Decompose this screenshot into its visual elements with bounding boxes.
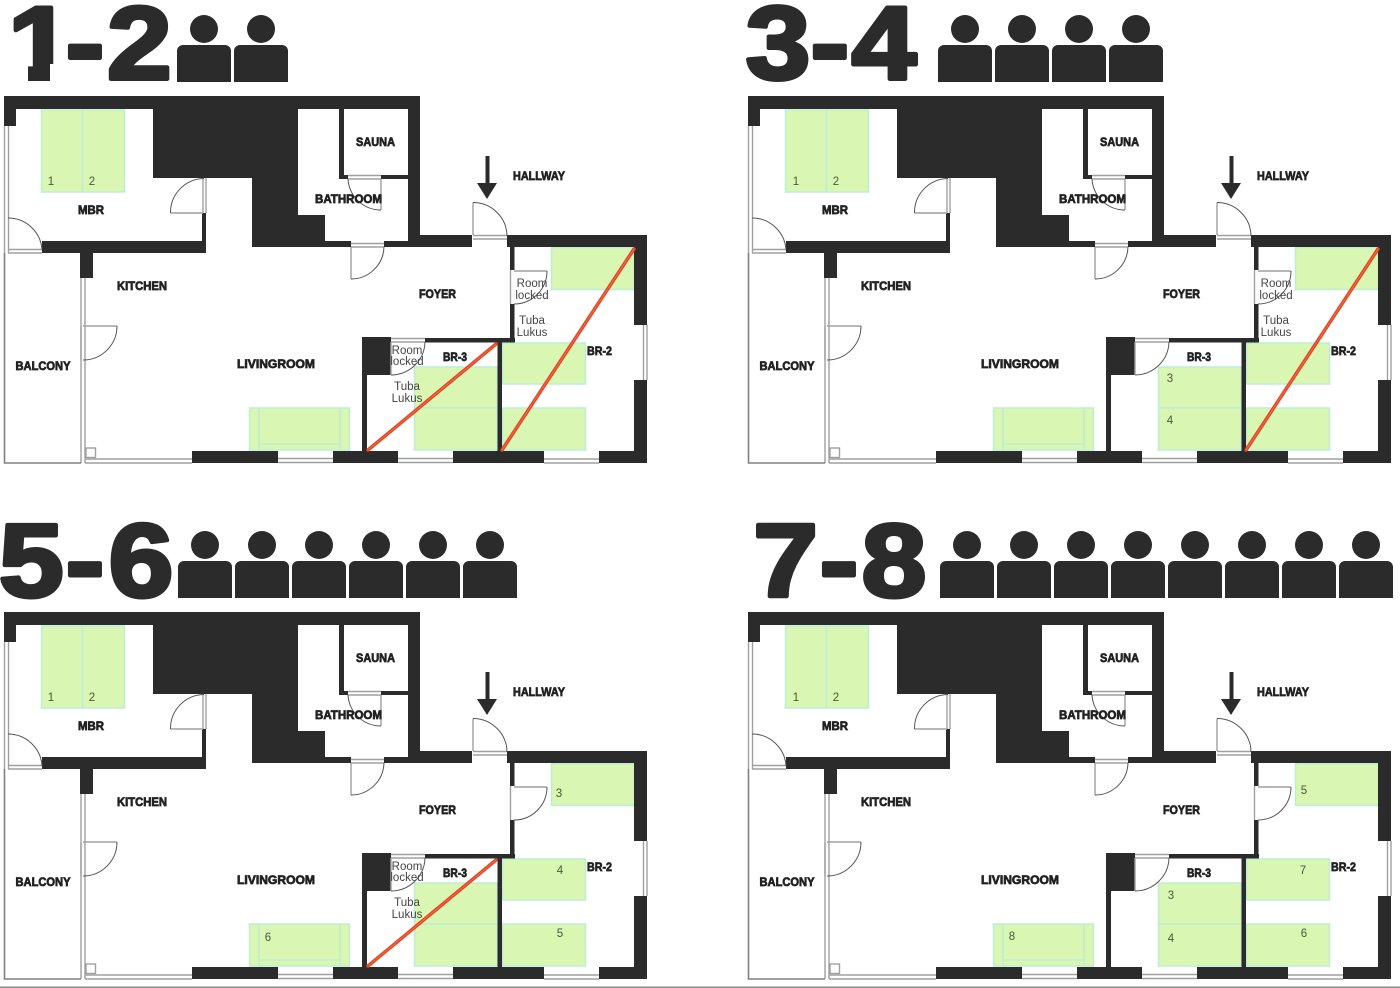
bed numbers: 2 (833, 692, 839, 704)
bed numbers (793, 692, 1307, 945)
room labels: KITCHEN (861, 795, 911, 809)
room labels (16, 651, 612, 889)
room labels: MBR (78, 203, 104, 217)
panel: 3-4 guests (746, 0, 1391, 463)
beds and sofa (786, 626, 1378, 966)
bed numbers: 2 (89, 692, 95, 704)
bed numbers: 3 (1168, 890, 1174, 902)
bed numbers: 2 (833, 176, 839, 188)
walls and doors (748, 612, 1391, 979)
closed room notes: Lukus (392, 393, 423, 405)
panel: 7-8 guests (748, 503, 1393, 979)
room labels: KITCHEN (117, 795, 167, 809)
closed room notes: Lukus (1261, 327, 1292, 339)
closed room notes: Tuba (519, 315, 545, 327)
walls and doors (4, 612, 647, 979)
beds and sofa (786, 110, 1378, 450)
room labels: BATHROOM (1059, 192, 1126, 206)
walls and doors (748, 96, 1391, 463)
closed room notes: Room (517, 278, 547, 290)
room labels: BR-2 (587, 860, 612, 874)
room labels (760, 135, 1356, 373)
room labels: BR-3 (1187, 866, 1211, 880)
closed room notes: Tuba (1263, 315, 1289, 327)
room labels: FOYER (419, 803, 456, 817)
floor plan: 7-8 guests (748, 612, 1391, 979)
closed room cross (1246, 249, 1378, 450)
icons: 6 people (178, 531, 517, 598)
bed numbers: 1 (793, 692, 799, 704)
floor plan: 3-4 guests (748, 96, 1391, 463)
closed room notes: locked (1259, 290, 1293, 302)
closed room notes: Lukus (517, 327, 548, 339)
icons: 4 people (938, 15, 1163, 82)
closed room notes: locked (390, 356, 424, 368)
closed room notes: Lukus (392, 909, 423, 921)
room labels: BALCONY (760, 359, 814, 373)
icon: entrance arrow (477, 672, 497, 715)
icon: entrance arrow (1221, 672, 1241, 715)
closed room notes: Tuba (394, 381, 420, 393)
room labels: LIVINGROOM (981, 357, 1059, 371)
bed numbers: 8 (1009, 931, 1015, 943)
bed numbers: 7 (1300, 865, 1306, 877)
room labels: HALLWAY (513, 169, 565, 183)
room labels (760, 651, 1356, 889)
closed room cross (368, 860, 496, 966)
room labels: BALCONY (16, 875, 70, 889)
bed numbers: 1 (48, 692, 54, 704)
room labels: SAUNA (356, 651, 395, 665)
closed room notes (390, 278, 549, 405)
closed room notes (1259, 278, 1293, 339)
room labels: BATHROOM (315, 192, 382, 206)
closed room notes: Room (392, 861, 422, 873)
room labels: SAUNA (356, 135, 395, 149)
closed room crosses (368, 249, 634, 450)
heading: 7-8: 7-8 (753, 503, 926, 619)
bed numbers: 1 (48, 176, 54, 188)
room labels: FOYER (1163, 287, 1200, 301)
closed room notes: locked (515, 290, 549, 302)
room labels: MBR (822, 203, 848, 217)
beds and sofa (42, 110, 634, 450)
room labels: MBR (78, 719, 104, 733)
room labels: MBR (822, 719, 848, 733)
icon: entrance arrow (1221, 156, 1241, 199)
icons: 8 people (940, 531, 1393, 598)
panel: 1-2 guests (0, 0, 647, 463)
room labels: LIVINGROOM (237, 357, 315, 371)
bed numbers: 4 (1167, 415, 1174, 427)
bed numbers: 2 (89, 176, 95, 188)
room labels: LIVINGROOM (237, 873, 315, 887)
walls and doors (4, 96, 647, 463)
bed numbers: 4 (557, 865, 564, 877)
icon: entrance arrow (477, 156, 497, 199)
icons: 2 people (177, 15, 288, 82)
bed numbers: 3 (556, 788, 562, 800)
room labels: LIVINGROOM (981, 873, 1059, 887)
bed numbers: 6 (1301, 928, 1307, 940)
bed numbers (793, 176, 1174, 427)
bed numbers (48, 692, 564, 944)
bed numbers: 6 (265, 932, 271, 944)
bed numbers (48, 176, 95, 188)
bed numbers: 4 (1168, 933, 1175, 945)
room labels: BR-3 (443, 866, 467, 880)
floor plan: 1-2 guests (4, 96, 647, 463)
room labels: KITCHEN (861, 279, 911, 293)
room labels: BR-2 (1331, 344, 1356, 358)
room labels: KITCHEN (117, 279, 167, 293)
room labels: FOYER (1163, 803, 1200, 817)
room labels: BR-3 (1187, 350, 1211, 364)
panel: 5-6 guests (0, 503, 647, 979)
beds and sofa (42, 626, 634, 966)
closed room notes: Room (392, 345, 422, 357)
room labels: BR-2 (1331, 860, 1356, 874)
bed numbers: 5 (1301, 785, 1307, 797)
room labels: BR-2 (587, 344, 612, 358)
bed numbers: 1 (793, 176, 799, 188)
room labels (16, 135, 612, 373)
bed numbers: 5 (557, 928, 563, 940)
room labels: BATHROOM (315, 708, 382, 722)
room labels: HALLWAY (1257, 685, 1309, 699)
closed room notes: Tuba (394, 897, 420, 909)
bed numbers: 3 (1167, 373, 1173, 385)
closed room notes (390, 861, 424, 921)
heading: 5-6: 5-6 (0, 503, 173, 619)
room labels: BATHROOM (1059, 708, 1126, 722)
room labels: BALCONY (16, 359, 70, 373)
room labels: HALLWAY (1257, 169, 1309, 183)
closed room notes: Room (1261, 278, 1291, 290)
room labels: SAUNA (1100, 651, 1139, 665)
room labels: FOYER (419, 287, 456, 301)
room labels: HALLWAY (513, 685, 565, 699)
room labels: BR-3 (443, 350, 467, 364)
floor plan: 5-6 guests (4, 612, 647, 979)
room labels: SAUNA (1100, 135, 1139, 149)
closed room notes: locked (390, 872, 424, 884)
room labels: BALCONY (760, 875, 814, 889)
